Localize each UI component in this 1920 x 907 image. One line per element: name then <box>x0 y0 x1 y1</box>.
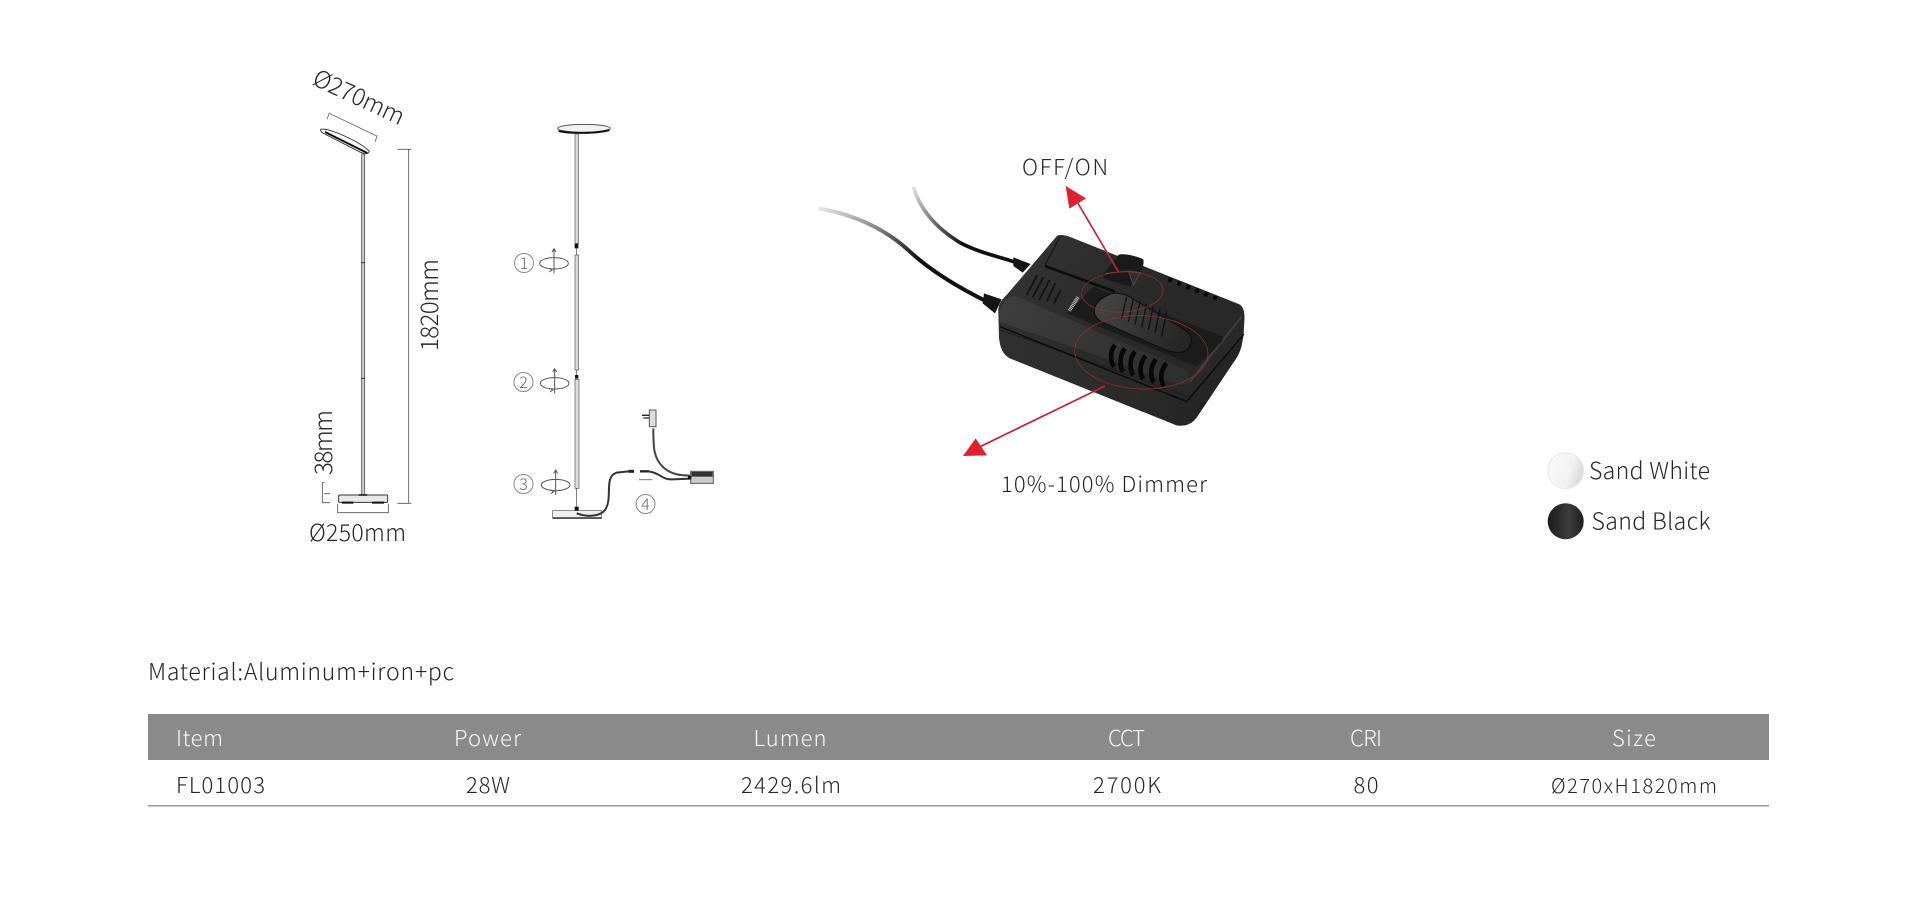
table header: Lumen <box>754 721 826 753</box>
step number 4 <box>636 491 655 515</box>
step number 1: 1 <box>520 250 528 274</box>
table header: CRI <box>1350 721 1382 753</box>
cables <box>818 187 1031 313</box>
colour swatch: sand black: Sand Black <box>1592 502 1711 536</box>
left ribs <box>1027 275 1061 303</box>
side vents <box>1111 345 1167 386</box>
table row: 2700K <box>1093 768 1161 800</box>
label: dimmer range: 10%-100% Dimmer <box>1001 467 1207 499</box>
dimension drawing: floor lamp <box>320 113 411 513</box>
specification table <box>148 714 1769 806</box>
table row: Ø270xH1820mm <box>1551 770 1717 799</box>
label: base diameter: Ø250mm <box>309 514 406 548</box>
colour swatch: sand black <box>1548 502 1711 539</box>
arrow to OFF/ON <box>1066 186 1118 272</box>
top plate step <box>1045 266 1115 292</box>
label: head diameter: Ø270mm <box>308 59 412 132</box>
dimmer slider knob <box>1094 293 1191 353</box>
colour swatch: sand white: Sand White <box>1589 452 1710 486</box>
table header: Power <box>454 721 521 753</box>
dimension line: base thickness <box>322 483 330 503</box>
table row: FL01003 <box>176 768 265 800</box>
step number 1 <box>514 250 534 274</box>
table header: Size <box>1612 721 1656 753</box>
dimmer upper shell <box>998 235 1244 396</box>
dimension line: height <box>397 149 411 503</box>
label: OFF/ON: OFF/ON <box>1022 150 1108 182</box>
step number 2 <box>514 369 533 393</box>
rotation icon 3 <box>541 470 570 495</box>
dimension line: base diameter <box>338 504 388 513</box>
label: height: 1820mm <box>410 259 445 351</box>
rotation icon 1 <box>540 249 568 273</box>
arrow to dimmer label <box>963 386 1105 456</box>
rotation icon 2 <box>540 369 569 393</box>
table row: 28W <box>466 768 510 800</box>
table row <box>148 768 1769 806</box>
dimmer lower shell <box>999 330 1244 426</box>
switch highlight <box>1105 271 1141 285</box>
step number 4: 4 <box>641 491 650 515</box>
step number 2: 2 <box>519 369 528 393</box>
highlight ellipses <box>1073 270 1209 391</box>
label: base thickness: 38mm <box>304 410 339 475</box>
table row: 2429.6lm <box>741 768 841 800</box>
table header: CCT <box>1108 721 1145 753</box>
front ridge highlight <box>1000 296 1190 385</box>
material text: Material:Aluminum+iron+pc <box>148 653 454 687</box>
colour swatch: sand white <box>1548 452 1710 489</box>
table header: Item <box>176 721 223 753</box>
dimmer recess panel <box>1067 287 1223 367</box>
lamp head <box>320 129 369 154</box>
dimension line: head diameter <box>327 113 377 142</box>
top vent dots <box>1168 279 1218 299</box>
on/off switch <box>1103 254 1144 287</box>
cable and connectors <box>577 410 713 516</box>
step number 3: 3 <box>519 471 528 495</box>
assembly drawing <box>540 124 713 518</box>
table row: 80 <box>1354 768 1378 800</box>
small label <box>1069 297 1078 311</box>
assembled lamp <box>553 124 610 518</box>
lamp pole <box>361 154 365 495</box>
table header <box>148 714 1769 760</box>
step number 3 <box>514 471 533 495</box>
dimmer photo <box>818 186 1244 456</box>
dimmer body <box>998 235 1244 426</box>
lamp base <box>339 495 388 503</box>
